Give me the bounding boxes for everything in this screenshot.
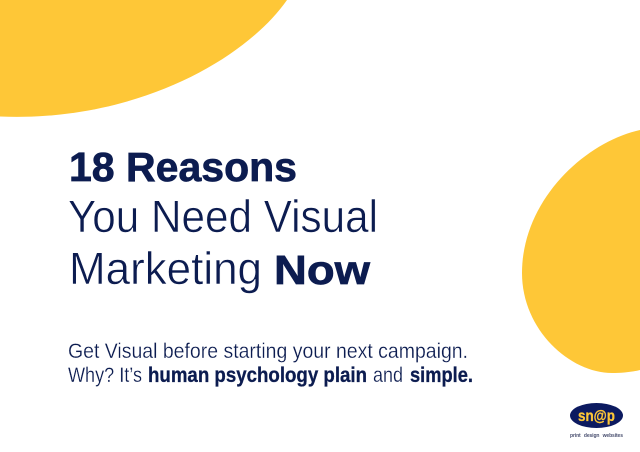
subtitle text: and [373, 364, 403, 387]
subtitle text [68, 340, 473, 387]
logo tagline: print design websites [570, 433, 623, 439]
subtitle text: Get Visual before starting your next campaign. [68, 340, 468, 363]
logo: snap print design websites [570, 403, 623, 439]
title: You Need Visual [68, 191, 378, 242]
title [68, 144, 378, 294]
subtitle text: simple. [410, 364, 473, 387]
title: Now [274, 247, 370, 293]
subtitle text: Why? It’s [68, 364, 142, 387]
shape: top-left yellow blob [0, 0, 287, 117]
logo wordmark: sn@p [578, 408, 615, 425]
title: Marketing [69, 243, 262, 294]
subtitle text: human psychology plain [148, 364, 367, 387]
title: 18 Reasons [69, 144, 297, 190]
logo badge [570, 403, 623, 428]
shape: right yellow blob [522, 130, 640, 373]
